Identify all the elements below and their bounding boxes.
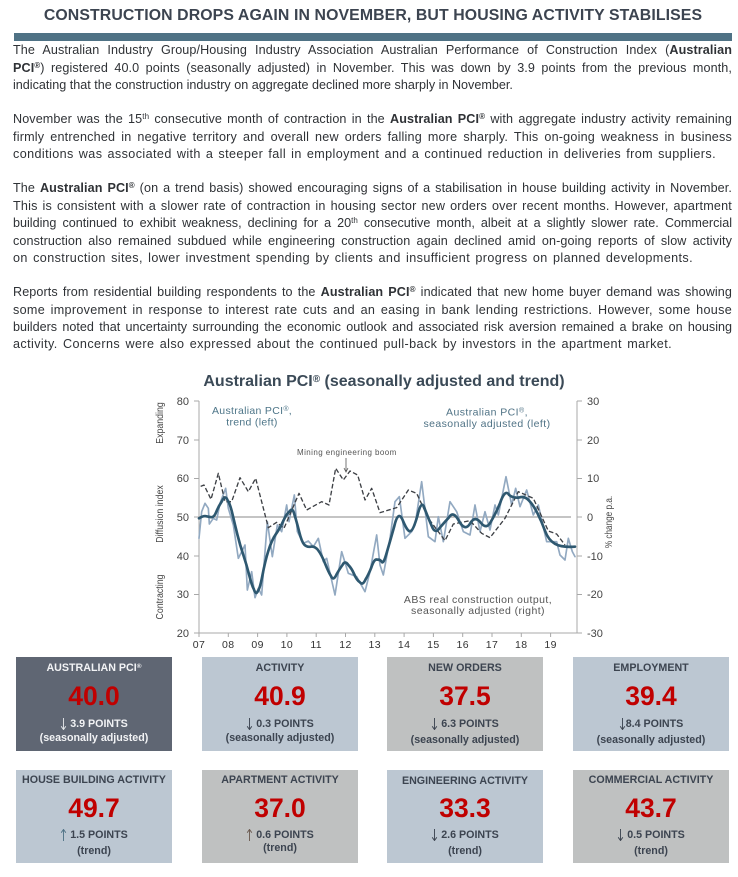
card: Employment: 8.4 POINTS bbox=[626, 718, 683, 730]
annotation: seasonally adjusted label: ® bbox=[519, 406, 525, 414]
card: Australian PCI bbox=[16, 657, 172, 751]
text block: paragraph 1: indicating that the construction industry on aggregate declined more sharply in November. bbox=[13, 78, 513, 92]
text block: paragraph 4: builders noted that uncertainty surrounding the economic outlook and associated risk aversion remained a brake on housing bbox=[13, 320, 732, 334]
right axis: -20 bbox=[587, 589, 603, 601]
card: Engineering activity: (trend) bbox=[448, 845, 482, 857]
card: Australian PCI: 40.0 bbox=[68, 681, 120, 711]
text block: paragraph 4: activity. Concerns were also expressed about the continued pull-back by investors in the apartment market. bbox=[13, 337, 672, 351]
annotation: trend label: , bbox=[289, 405, 292, 417]
card: Employment: 39.4 bbox=[625, 681, 677, 711]
line: ABS real construction output bbox=[201, 468, 565, 545]
text block: paragraph 2: conditions was associated with a steeper fall in employment and a continued reduction in deliveries from suppliers. bbox=[13, 147, 716, 161]
text block: paragraph 1 bbox=[13, 43, 732, 92]
x axis: 14 bbox=[398, 639, 410, 651]
text block: paragraph 3: This is consistent with a slower rate of contraction in housing sector new orders over recent months. However, apartment bbox=[13, 199, 732, 213]
x axis: 09 bbox=[251, 639, 264, 651]
annotation: mining boom: Mining engineering boom bbox=[297, 448, 397, 457]
axis titles: Expanding bbox=[153, 402, 165, 444]
card: Activity bbox=[202, 657, 358, 751]
text block: paragraph 1: The Australian Industry Group/Housing Industry Association Australian Performance of Construction Index (Australian bbox=[13, 43, 732, 57]
zero line bbox=[199, 516, 571, 518]
left axis: 70 bbox=[177, 435, 189, 447]
card: House building activity: 1.5 POINTS bbox=[70, 829, 128, 841]
left axis: 20 bbox=[177, 628, 189, 640]
card: Activity: (seasonally adjusted) bbox=[226, 732, 334, 744]
text block: paragraph 4: Reports from residential building respondents to the Australian PCI® indicated that new home buyer demand was showing bbox=[13, 285, 732, 299]
x axis: 17 bbox=[486, 639, 498, 651]
card: Employment: (seasonally adjusted) bbox=[597, 734, 705, 746]
data lines bbox=[199, 468, 575, 598]
x axis: 10 bbox=[281, 639, 293, 651]
card: Commercial activity bbox=[573, 770, 729, 863]
card: Commercial activity: 0.5 POINTS bbox=[627, 829, 685, 841]
card: Apartment activity: 0.6 POINTS bbox=[256, 829, 314, 841]
axis titles bbox=[153, 402, 614, 619]
title: CONSTRUCTION DROPS AGAIN IN NOVEMBER, BUT HOUSING ACTIVITY STABILISES bbox=[44, 7, 702, 24]
left axis: 60 bbox=[177, 473, 189, 485]
card: Activity: 40.9 bbox=[254, 681, 306, 711]
card: Apartment activity bbox=[202, 770, 358, 863]
title rule bar bbox=[14, 33, 732, 41]
chart title: (seasonally adjusted and trend) bbox=[320, 373, 565, 390]
card: Commercial activity: COMMERCIAL ACTIVITY bbox=[589, 774, 713, 786]
annotation: trend label: trend (left) bbox=[226, 416, 278, 428]
card: Commercial activity: (trend) bbox=[634, 845, 668, 857]
card: House building activity: HOUSE BUILDING ACTIVITY bbox=[22, 774, 166, 786]
x axis: 15 bbox=[427, 639, 440, 651]
annotation: seasonally adjusted label: seasonally adjusted (left) bbox=[423, 418, 551, 430]
card: Apartment activity: (trend) bbox=[263, 842, 297, 854]
x axis: 19 bbox=[544, 639, 557, 651]
annotation: trend label: ® bbox=[283, 405, 289, 413]
card: New orders: (seasonally adjusted) bbox=[411, 734, 519, 746]
card: Engineering activity bbox=[387, 770, 543, 863]
card: Commercial activity: 43.7 bbox=[625, 793, 677, 823]
text block: paragraph 3: building continued to exhibit weakness, declining for a 20th consecutive month, albeit at a slightly slower rate. Commercial bbox=[13, 216, 732, 230]
card: Apartment activity: APARTMENT ACTIVITY bbox=[221, 774, 339, 786]
text block: paragraph 3: The Australian PCI® (on a trend basis) showed encouraging signs of a stabilisation in house building activity in November. bbox=[13, 181, 732, 195]
axis titles: Diffusion index bbox=[153, 485, 165, 543]
right axis: -30 bbox=[587, 628, 603, 640]
card: Australian PCI: AUSTRALIAN PCI® bbox=[46, 662, 142, 674]
annotation: ABS output label: seasonally adjusted (right) bbox=[411, 605, 545, 617]
right axis: 0 bbox=[587, 512, 593, 524]
text block: paragraph 3: on construction sites, lower investment spending by clients and insufficient progress on planned developments. bbox=[13, 251, 693, 265]
card: New orders: 37.5 bbox=[439, 681, 491, 711]
line: PCI trend bbox=[199, 493, 575, 593]
right axis: 10 bbox=[587, 473, 599, 485]
card: Employment: EMPLOYMENT bbox=[613, 662, 689, 674]
card: Engineering activity: 2.6 POINTS bbox=[441, 829, 499, 841]
card: Engineering activity: 33.3 bbox=[439, 793, 491, 823]
x axis: 07 bbox=[193, 639, 205, 651]
left axis bbox=[177, 396, 199, 640]
chart title: Australian PCI bbox=[203, 373, 313, 390]
x axis: 11 bbox=[310, 639, 322, 651]
axis titles: Contracting bbox=[153, 575, 165, 619]
card: House building activity bbox=[16, 770, 172, 863]
x axis bbox=[193, 633, 577, 651]
annotation: ABS output label: ABS real construction output, bbox=[404, 594, 552, 606]
right axis bbox=[577, 396, 603, 640]
left axis: 50 bbox=[177, 512, 189, 524]
text block: paragraph 2: November was the 15th consecutive month of contraction in the Australian PCI® with aggregate industry activity remaining bbox=[13, 112, 732, 126]
card: Apartment activity: 37.0 bbox=[254, 793, 306, 823]
text block: paragraph 2: firmly entrenched in negative territory and overall new orders falling more sharply. This on-going weakness in business bbox=[13, 130, 732, 144]
right axis: -10 bbox=[587, 551, 603, 563]
text block: paragraph 3 bbox=[13, 181, 732, 265]
annotation: mining boom bbox=[297, 448, 397, 472]
card: New orders: NEW ORDERS bbox=[428, 662, 502, 674]
annotation: trend label: Australian PCI bbox=[212, 405, 283, 417]
card: Activity: ACTIVITY bbox=[256, 662, 304, 674]
x axis: 13 bbox=[369, 639, 381, 651]
line: seasonally adjusted PCI bbox=[199, 477, 575, 598]
text block: paragraph 3: construction also remained subdued while engineering construction again declined amid on-going reports of slow activity bbox=[13, 234, 732, 248]
card: Australian PCI: 3.9 POINTS bbox=[70, 718, 128, 730]
text block: paragraph 4 bbox=[13, 285, 732, 351]
card: House building activity: (trend) bbox=[77, 845, 111, 857]
x axis: 18 bbox=[515, 639, 528, 651]
annotation: seasonally adjusted label: Australian PCI bbox=[446, 406, 519, 418]
x axis: 12 bbox=[339, 639, 352, 651]
card: Employment bbox=[573, 657, 729, 751]
right axis: 30 bbox=[587, 396, 599, 408]
card: New orders bbox=[387, 657, 543, 751]
card: House building activity: 49.7 bbox=[68, 793, 120, 823]
card: Australian PCI: (seasonally adjusted) bbox=[40, 732, 148, 744]
text block: paragraph 4: some improvement in response to interest rate cuts and an easing in bank lending restrictions. However, some house bbox=[13, 303, 732, 317]
x axis: 16 bbox=[456, 639, 469, 651]
right axis: 20 bbox=[587, 435, 599, 447]
annotation: seasonally adjusted label: , bbox=[525, 406, 528, 418]
card: New orders: 6.3 POINTS bbox=[441, 718, 499, 730]
text block: paragraph 1: PCI®) registered 40.0 points (seasonally adjusted) in November. This was down by 3.9 points from the previous month, bbox=[13, 61, 732, 75]
left axis: 40 bbox=[177, 551, 189, 563]
x axis: 08 bbox=[222, 639, 235, 651]
chart title: ® bbox=[313, 374, 321, 385]
axis titles: % change p.a. bbox=[603, 496, 614, 548]
text block: paragraph 2 bbox=[13, 112, 732, 161]
left axis: 80 bbox=[177, 396, 189, 408]
left axis: 30 bbox=[177, 589, 189, 601]
card: Engineering activity: ENGINEERING ACTIVITY bbox=[402, 775, 528, 787]
card: Activity: 0.3 POINTS bbox=[256, 718, 314, 730]
